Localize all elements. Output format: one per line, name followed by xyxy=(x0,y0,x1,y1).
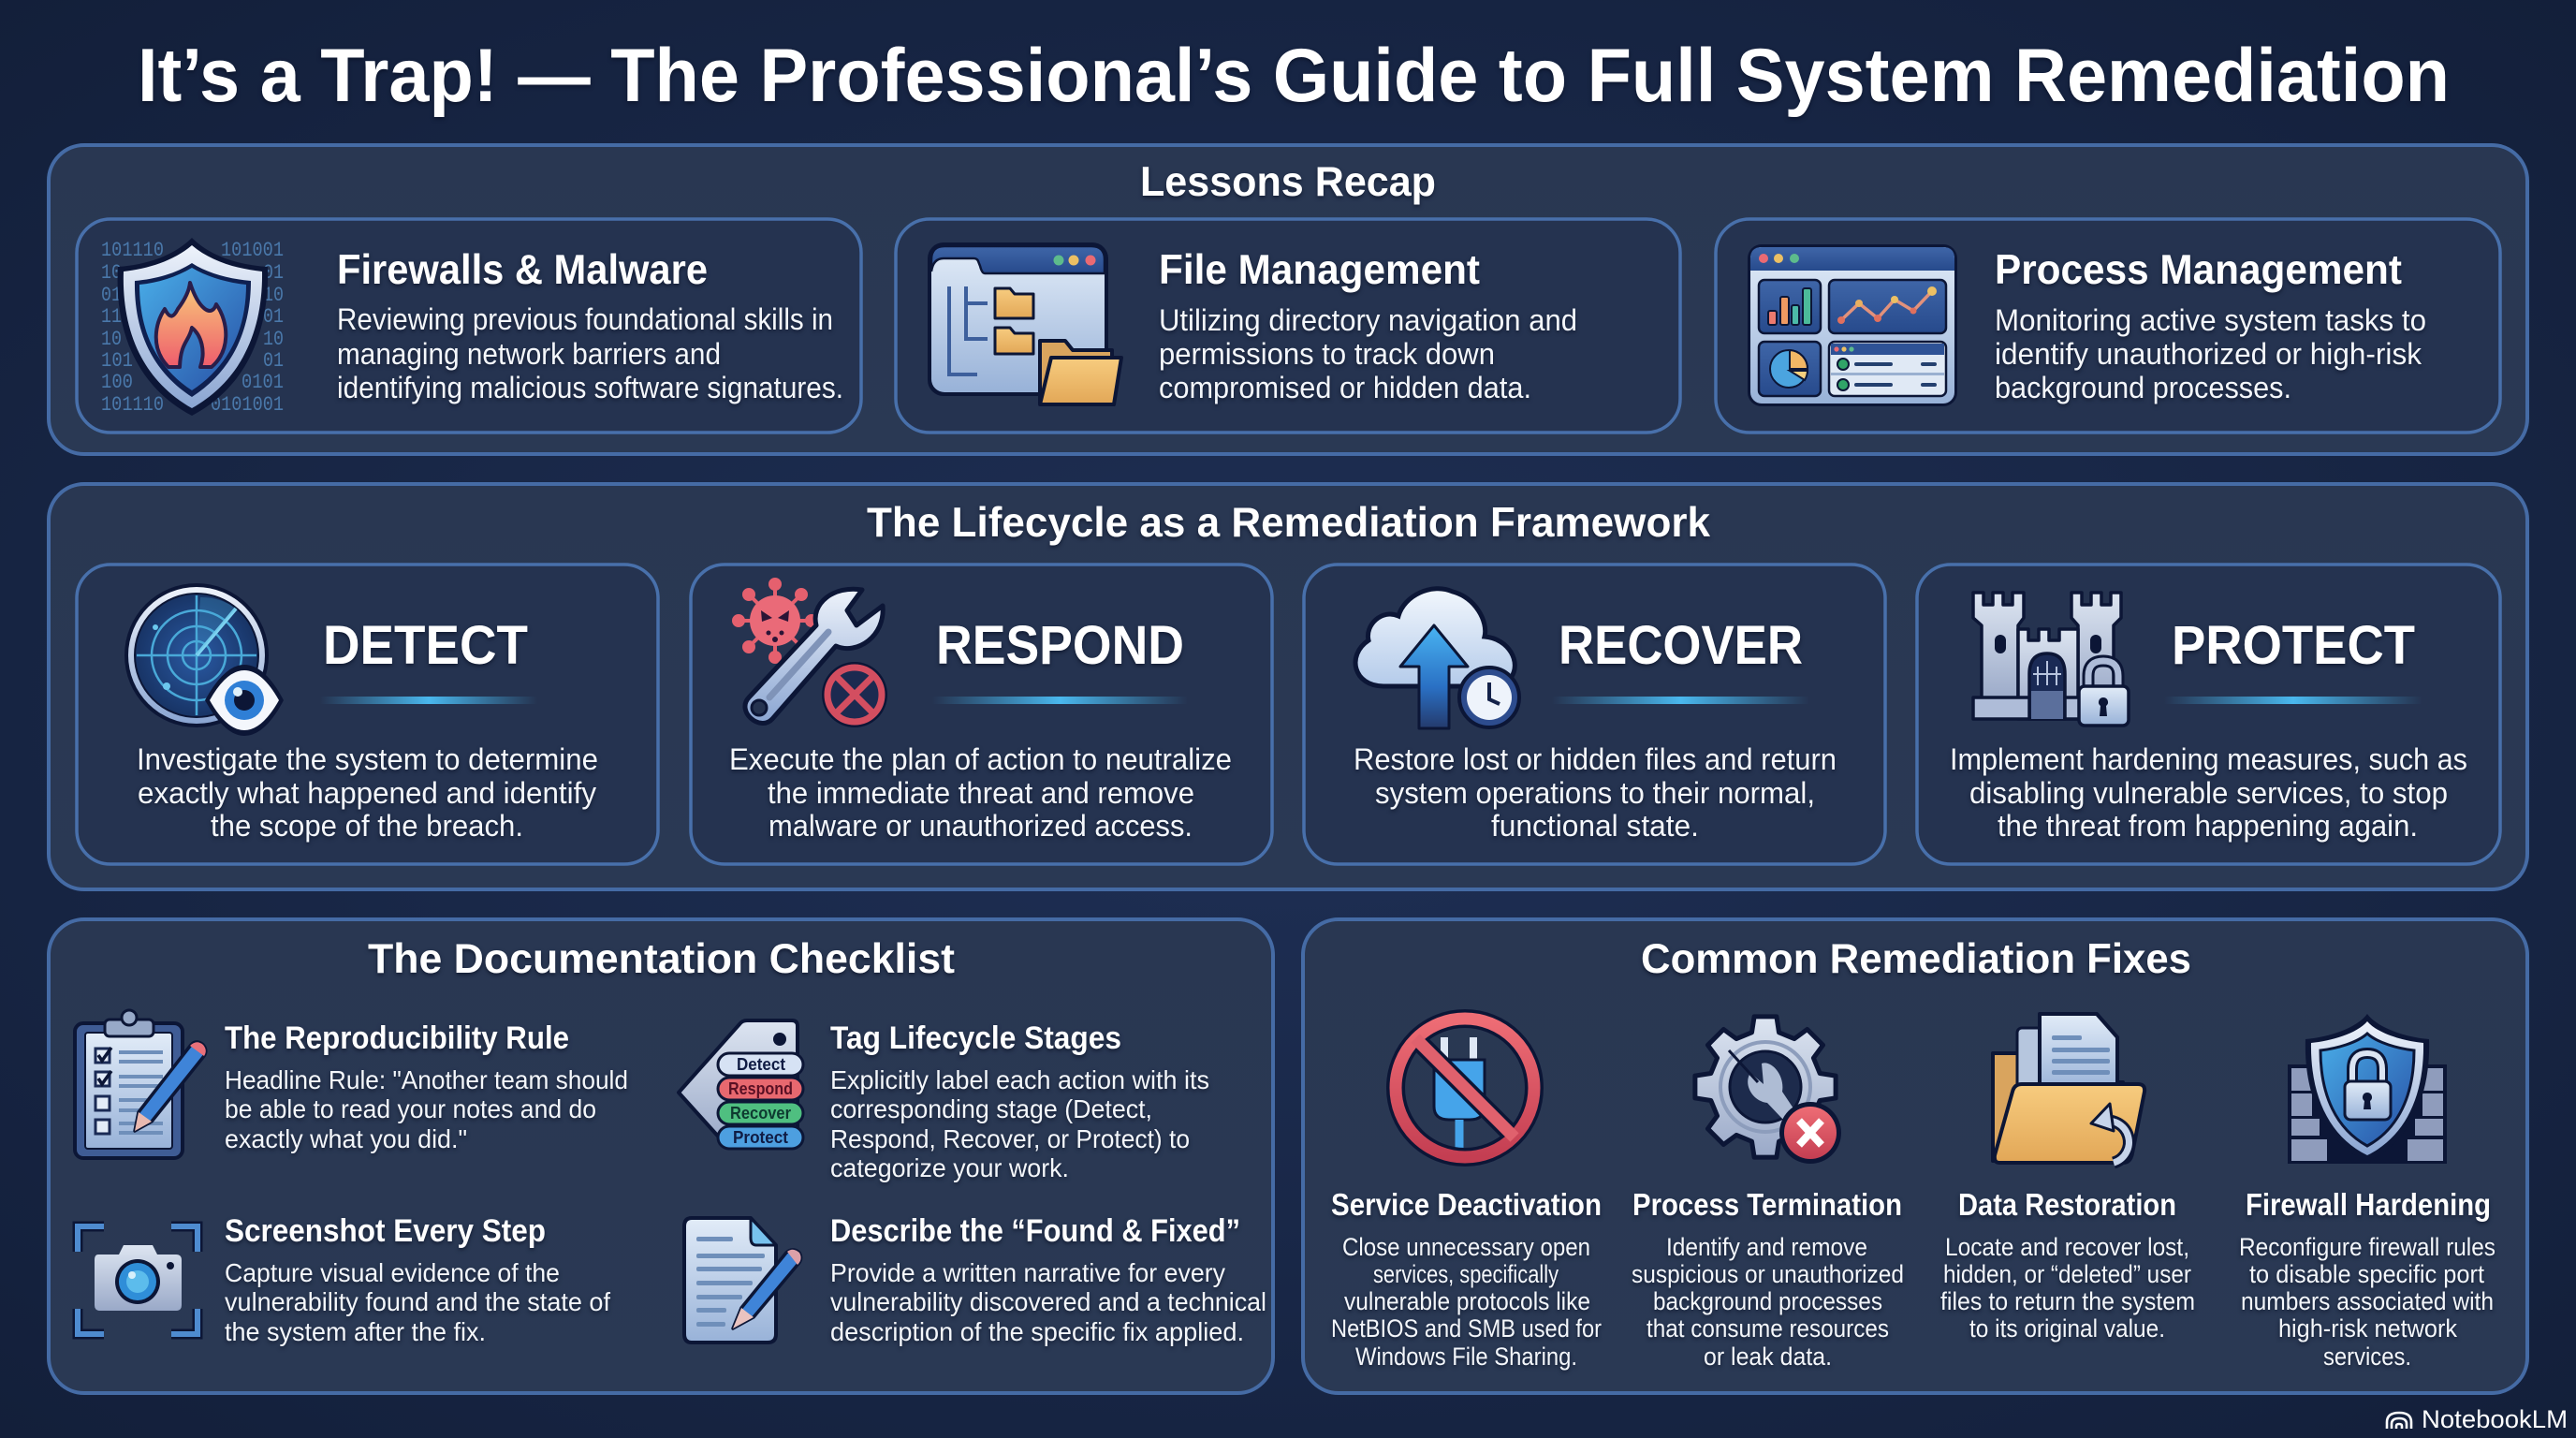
icon: shield with flame and binary: 100 xyxy=(101,371,133,394)
fix description: NetBIOS and SMB used for xyxy=(1331,1314,1602,1343)
stage description: Implement hardening measures, such as xyxy=(1950,742,2467,776)
icon: shield with flame and binary: 101001 xyxy=(221,239,284,262)
item description: Explicitly label each action with its xyxy=(830,1065,1209,1094)
item description: description of the specific fix applied. xyxy=(830,1317,1244,1346)
icon: shield with flame and binary: 10 xyxy=(101,328,122,351)
fix description: to its original value. xyxy=(1969,1314,2165,1343)
card: respond xyxy=(691,565,1272,864)
stage description: Investigate the system to determine xyxy=(137,742,598,776)
card heading: Firewalls & Malware xyxy=(337,247,708,293)
icon: shield with flame and binary: 10 xyxy=(263,328,284,351)
icon: lifecycle tag with pills: Recover xyxy=(730,1104,791,1123)
fix description: Identify and remove xyxy=(1666,1233,1867,1261)
item description: Provide a written narrative for every xyxy=(830,1258,1225,1287)
card: process management xyxy=(1716,219,2500,433)
icon: castle with padlock xyxy=(1973,593,2129,726)
stage description xyxy=(1354,742,1837,843)
card: protect xyxy=(1917,565,2500,864)
fix description: services, specifically xyxy=(1373,1260,1559,1288)
fix description xyxy=(1331,1233,1602,1371)
accent bar xyxy=(320,697,537,704)
icon: shield with flame and binary: 101110 xyxy=(101,393,164,417)
fix description: vulnerable protocols like xyxy=(1344,1287,1590,1315)
card: firewalls and malware xyxy=(77,219,861,433)
fix description: to disable specific port xyxy=(2249,1260,2484,1288)
stage title: PROTECT xyxy=(2172,615,2415,676)
fix description xyxy=(1632,1233,1904,1371)
icon: lifecycle tag with pills: Respond xyxy=(728,1079,793,1098)
card description xyxy=(1995,303,2426,404)
icon: shield with flame and binary xyxy=(101,238,284,417)
card description: identify unauthorized or high-risk xyxy=(1995,337,2422,371)
item description: Headline Rule: "Another team should xyxy=(225,1065,628,1094)
fix: data restoration xyxy=(1940,1014,2195,1343)
icon: folder with document and undo arrow xyxy=(1993,1014,2144,1163)
card description: background processes. xyxy=(1995,371,2291,404)
panel: common remediation fixes xyxy=(1303,919,2527,1393)
icon: crossed-out plug xyxy=(1396,1019,1534,1157)
stage description xyxy=(137,742,598,843)
stage title: DETECT xyxy=(323,615,528,676)
fix heading: Data Restoration xyxy=(1958,1187,2176,1222)
card description: Monitoring active system tasks to xyxy=(1995,303,2426,337)
item: screenshot every step xyxy=(78,1213,610,1346)
item description: vulnerability discovered and a technical xyxy=(830,1287,1266,1316)
fix description: hidden, or “deleted” user xyxy=(1943,1260,2191,1288)
fix description xyxy=(2239,1233,2496,1371)
icon: shield with flame and binary: 01 xyxy=(263,261,284,285)
title: It’s a Trap! — The Professional’s Guide to Full System Remediation xyxy=(138,34,2450,118)
stage description: the immediate threat and remove xyxy=(768,776,1194,810)
item: describe found and fixed xyxy=(684,1213,1266,1346)
icon: shield with flame and binary: 01 xyxy=(101,284,122,307)
item description: Respond, Recover, or Protect) to xyxy=(830,1124,1190,1153)
item description: vulnerability found and the state of xyxy=(225,1287,610,1316)
fix description: high-risk network xyxy=(2278,1314,2457,1343)
icon: shield with flame and binary: 101110 xyxy=(101,239,164,262)
item description: be able to read your notes and do xyxy=(225,1094,596,1123)
accent bar xyxy=(932,697,1188,704)
fix: service deactivation xyxy=(1331,1019,1602,1371)
fix description: files to return the system xyxy=(1940,1287,2195,1315)
icon: clipboard and pencil xyxy=(75,1010,206,1158)
icon: lifecycle tag with pills: Protect xyxy=(733,1128,788,1147)
icon: lifecycle tag with pills: Detect xyxy=(737,1055,785,1074)
heading: documentation checklist: The Documentation Checklist xyxy=(368,936,955,982)
icon: shield with flame and binary: 101 xyxy=(101,349,133,373)
fix description xyxy=(1940,1233,2195,1343)
stage description: functional state. xyxy=(1491,809,1699,843)
icon: shield with flame and binary: 01 xyxy=(263,305,284,329)
fix description: or leak data. xyxy=(1704,1343,1832,1371)
item heading: Tag Lifecycle Stages xyxy=(830,1020,1121,1056)
item description: corresponding stage (Detect, xyxy=(830,1094,1152,1123)
item description xyxy=(830,1065,1209,1182)
icon: shield with flame and binary: 01 xyxy=(263,349,284,373)
accent bar xyxy=(2164,697,2422,704)
stage description xyxy=(1950,742,2467,843)
fix description: Close unnecessary open xyxy=(1342,1233,1590,1261)
card: detect xyxy=(77,565,658,864)
icon: virus, wrench and block xyxy=(734,580,887,727)
stage description: Restore lost or hidden files and return xyxy=(1354,742,1837,776)
icon: shield with flame and binary: 0101001 xyxy=(211,393,284,417)
card heading: File Management xyxy=(1159,247,1480,293)
heading: common remediation fixes: Common Remediation Fixes xyxy=(1641,936,2191,982)
card description: identifying malicious software signatures. xyxy=(337,371,843,404)
fix description: background processes xyxy=(1653,1287,1882,1315)
card description xyxy=(337,302,843,404)
watermark: NotebookLM: NotebookLM xyxy=(2422,1405,2568,1433)
fix: process termination xyxy=(1632,1017,1904,1371)
fix description: suspicious or unauthorized xyxy=(1632,1260,1904,1288)
item: tag lifecycle stages xyxy=(679,1020,1209,1182)
fix: firewall hardening xyxy=(2239,1014,2496,1371)
icon: shield with flame and binary: 11 xyxy=(101,305,122,329)
fix heading: Service Deactivation xyxy=(1331,1187,1602,1222)
item description: exactly what you did." xyxy=(225,1124,467,1153)
fix description: Reconfigure firewall rules xyxy=(2239,1233,2496,1261)
item heading: Describe the “Found & Fixed” xyxy=(830,1213,1240,1249)
icon: shield with flame and binary: 10 xyxy=(263,284,284,307)
card: recover xyxy=(1304,565,1885,864)
heading: lifecycle framework: The Lifecycle as a Remediation Framework xyxy=(867,500,1710,546)
icon: lifecycle tag with pills xyxy=(679,1020,803,1149)
fix heading: Process Termination xyxy=(1632,1187,1902,1222)
icon: document and pen xyxy=(684,1218,801,1343)
stage title: RECOVER xyxy=(1559,615,1803,676)
stage description: Execute the plan of action to neutralize xyxy=(729,742,1232,776)
fix description: numbers associated with xyxy=(2241,1287,2494,1315)
icon: shield, lock and brick wall xyxy=(2288,1014,2447,1164)
panel: documentation checklist xyxy=(49,919,1273,1393)
stage description: the threat from happening again. xyxy=(1998,809,2418,843)
item heading: The Reproducibility Rule xyxy=(225,1020,569,1056)
card description: Utilizing directory navigation and xyxy=(1159,303,1577,337)
icon: camera with focus brackets xyxy=(78,1226,198,1334)
icon: process dashboard xyxy=(1748,244,1957,406)
icon: gear with red cross xyxy=(1695,1017,1841,1164)
item description: Capture visual evidence of the xyxy=(225,1258,560,1287)
card heading: Process Management xyxy=(1995,247,2402,293)
icon: shield with flame and binary: 10 xyxy=(101,261,122,285)
stage description: malware or unauthorized access. xyxy=(768,809,1193,843)
item heading: Screenshot Every Step xyxy=(225,1213,546,1249)
card: file management xyxy=(896,219,1680,433)
item description xyxy=(225,1258,610,1346)
item: reproducibility rule xyxy=(75,1010,628,1158)
card description: compromised or hidden data. xyxy=(1159,371,1531,404)
icon: cloud upload with clock xyxy=(1355,589,1519,728)
icon: radar with eye xyxy=(124,583,284,736)
item description: the system after the fix. xyxy=(225,1317,486,1346)
item description xyxy=(225,1065,628,1153)
panel: lessons recap xyxy=(49,145,2527,454)
card description xyxy=(1159,303,1577,404)
panel: lifecycle framework xyxy=(49,484,2527,889)
card description: managing network barriers and xyxy=(337,337,721,371)
heading: lessons recap: Lessons Recap xyxy=(1140,159,1436,205)
icon: file window with folders xyxy=(928,242,1121,404)
stage description: the scope of the breach. xyxy=(211,809,523,843)
stage description: system operations to their normal, xyxy=(1375,776,1815,810)
fix description: services. xyxy=(2323,1343,2411,1371)
stage description xyxy=(729,742,1232,843)
item description: categorize your work. xyxy=(830,1153,1069,1182)
accent bar xyxy=(1552,697,1809,704)
fix description: that consume resources xyxy=(1647,1314,1889,1343)
stage description: disabling vulnerable services, to stop xyxy=(1969,776,2448,810)
card description: Reviewing previous foundational skills in xyxy=(337,302,833,336)
card description: permissions to track down xyxy=(1159,337,1495,371)
fix description: Windows File Sharing. xyxy=(1355,1343,1577,1371)
fix heading: Firewall Hardening xyxy=(2246,1187,2491,1222)
stage description: exactly what happened and identify xyxy=(138,776,597,810)
fix description: Locate and recover lost, xyxy=(1945,1233,2189,1261)
stage title: RESPOND xyxy=(936,615,1184,676)
icon: shield with flame and binary: 0101 xyxy=(242,371,284,394)
item description xyxy=(830,1258,1266,1346)
